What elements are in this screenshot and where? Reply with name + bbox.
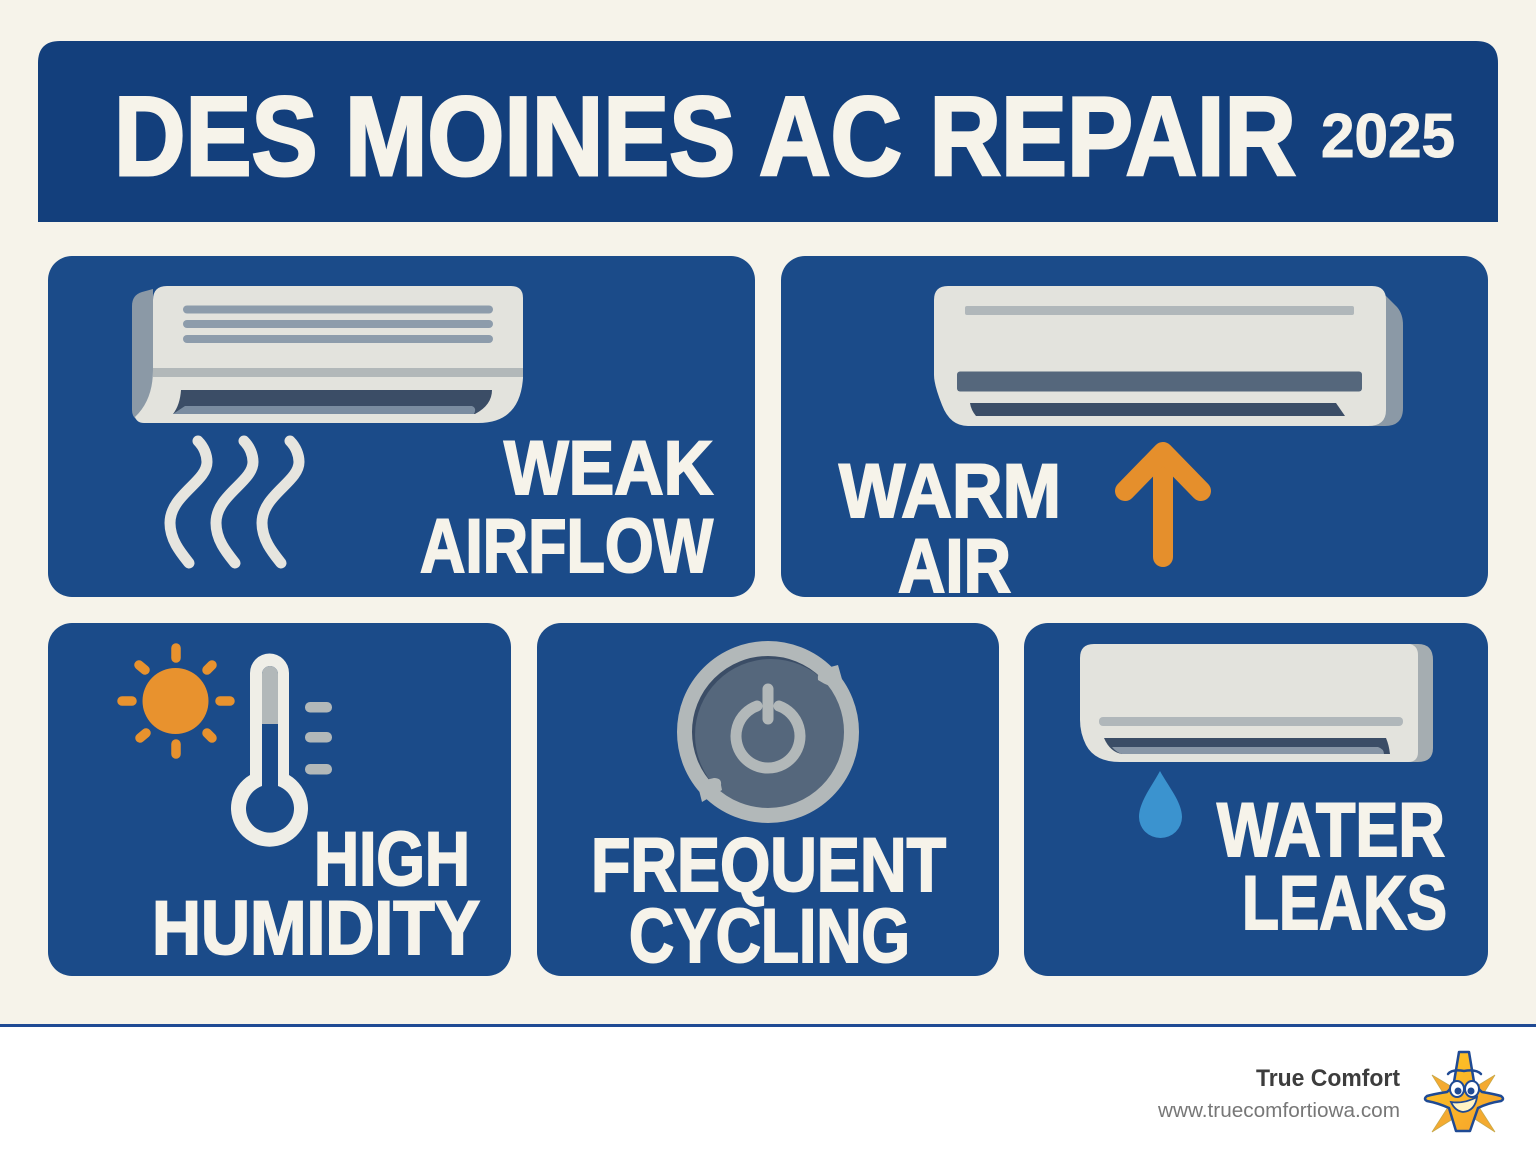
footer — [0, 1024, 1536, 1154]
website: www.truecomfortiowa.com — [1157, 1100, 1400, 1122]
panel: water leaks — [1024, 623, 1488, 976]
title banner — [38, 41, 1498, 222]
label: warm air: AIR — [898, 524, 1011, 609]
icon: up arrow — [1125, 452, 1201, 557]
label: frequent cycling: CYCLING — [629, 894, 910, 979]
panel: frequent cycling — [537, 623, 999, 979]
label: water leaks: WATER — [1217, 788, 1445, 873]
icon: air conditioner unit — [934, 286, 1403, 426]
icon: thermometer — [231, 654, 332, 847]
icon: power button with cycle ring — [684, 648, 852, 816]
label: water leaks: LEAKS — [1242, 861, 1447, 946]
brand name: True Comfort — [1256, 1065, 1400, 1092]
icon: air conditioner unit — [1080, 644, 1433, 762]
label: high humidity — [152, 817, 480, 971]
panel: warm air — [781, 256, 1488, 609]
label: high humidity: HIGH — [314, 817, 470, 902]
label: warm air — [839, 449, 1061, 609]
label: high humidity: HUMIDITY — [152, 886, 480, 971]
label: frequent cycling — [591, 823, 946, 979]
icon: air conditioner unit — [132, 286, 523, 423]
icon: sun — [122, 648, 230, 754]
year: 2025 — [1321, 102, 1455, 171]
panel: high humidity — [48, 623, 511, 976]
icon: water drop — [1139, 771, 1182, 838]
label: warm air: WARM — [839, 449, 1061, 534]
icon: star mascot logo — [1425, 1052, 1503, 1132]
label: water leaks — [1217, 788, 1447, 946]
title: DES MOINES AC REPAIR — [114, 74, 1296, 199]
label: frequent cycling: FREQUENT — [591, 823, 946, 908]
label: weak airflow: WEAK — [504, 426, 713, 511]
panel: weak airflow — [48, 256, 755, 597]
label: weak airflow — [420, 426, 713, 589]
label: weak airflow: AIRFLOW — [420, 504, 713, 589]
icon: airflow waves — [170, 441, 299, 563]
